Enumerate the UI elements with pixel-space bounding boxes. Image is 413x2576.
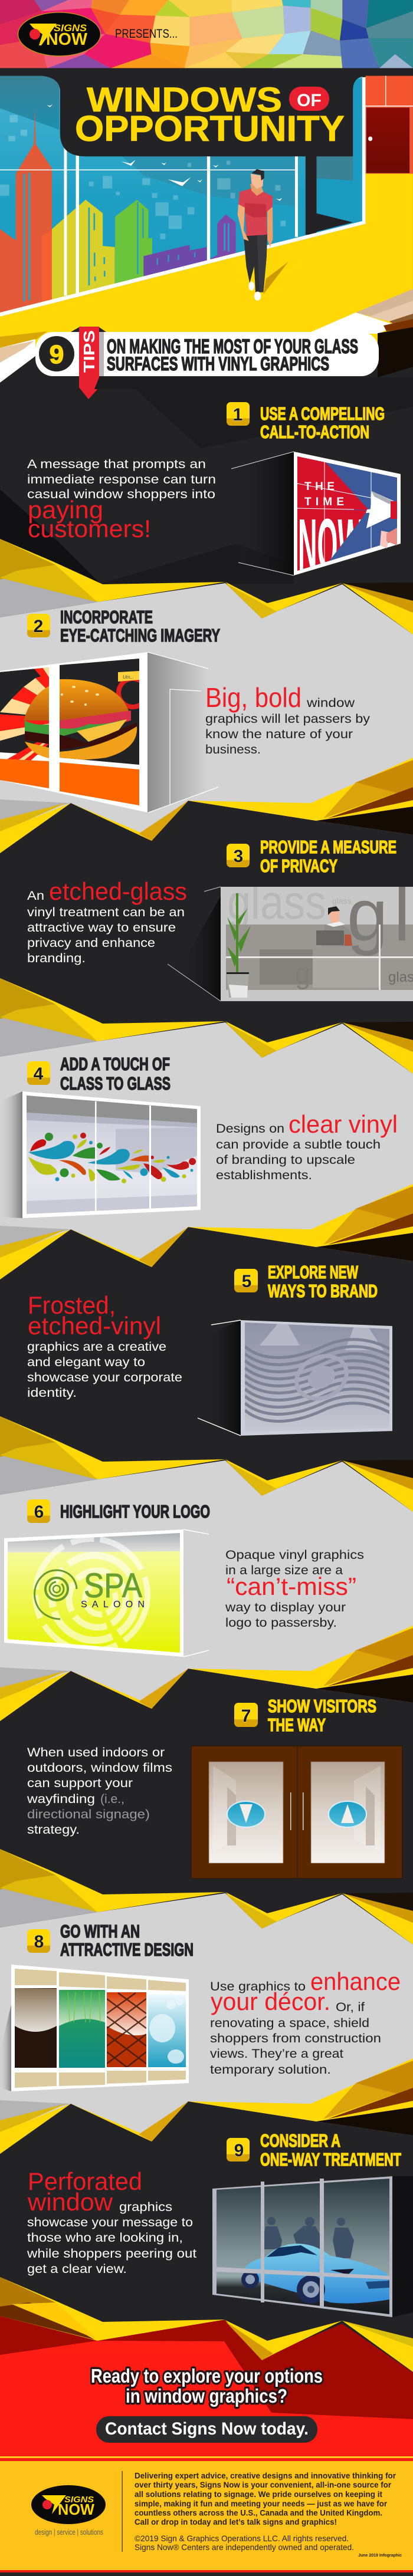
badge 4: 4 (34, 1064, 44, 1084)
body 8: renovating a space, shield (210, 2016, 369, 2030)
silhouettes (261, 2217, 354, 2258)
body 3: attractive way to ensure (27, 921, 176, 935)
panel: tip 4 clear vinyl (0, 1054, 398, 1218)
panel: call to action (91, 2365, 323, 2443)
badge 7: 7 (241, 1706, 251, 1726)
body 8 (210, 1968, 401, 2077)
heading 7: SHOW VISITORS (268, 1696, 376, 1716)
zigzag divider 2 (0, 758, 413, 853)
heading 2: INCORPORATE (60, 607, 153, 627)
heading 5: EXPLORE NEW (268, 1262, 358, 1282)
body 7: can support your (27, 1776, 133, 1790)
panel: tip 8 decor (0, 1921, 401, 2091)
spa spiral (34, 1570, 77, 1619)
body 4: Designs on (216, 1122, 284, 1136)
body 1: customers! (28, 515, 151, 542)
footer logo (31, 2485, 106, 2524)
cta heading (91, 2365, 323, 2407)
footer copyright (135, 2534, 402, 2558)
plant (227, 893, 251, 973)
heading: windows of opportunity (75, 81, 345, 149)
heading 7: THE WAY (268, 1715, 326, 1735)
body 4: clear vinyl (289, 1110, 398, 1138)
body 6: in a large size are a (225, 1564, 343, 1577)
body 5: Frosted, (28, 1291, 116, 1319)
window graphic 6: SPA (84, 1567, 142, 1605)
badge 3: 3 (234, 847, 243, 866)
body 3: branding. (27, 952, 86, 965)
badge 5: 5 (242, 1272, 251, 1291)
panel art 4 (148, 1994, 186, 2067)
heading 7 (268, 1696, 376, 1735)
tips count circle (39, 336, 74, 371)
body 6 (225, 1548, 364, 1630)
contact button (96, 2416, 317, 2443)
heading 8: ATTRACTIVE DESIGN (60, 1939, 194, 1960)
window graphic 3 (168, 874, 413, 1001)
body 6: “can’t-miss” (227, 1572, 356, 1600)
window graphic 9 (212, 2176, 413, 2317)
marquee sign (0, 68, 413, 156)
footer about text: simple, making it fun and meeting your needs — just as we have for (135, 2499, 388, 2508)
footer copyright: June 2019 Infographic (358, 2554, 402, 2558)
heading 1: CALL-TO-ACTION (260, 422, 369, 442)
body 9: while shoppers peering out (27, 2247, 196, 2261)
door graphic (191, 1746, 402, 1878)
body 8: views. They’re a great (210, 2047, 343, 2061)
panel: tip 3 privacy (27, 837, 413, 1001)
body 3 (27, 877, 187, 965)
badge 6 (27, 1499, 50, 1523)
panel: hero storefront illustration (0, 68, 413, 389)
body 9: get a clear view. (27, 2262, 127, 2276)
body 3: etched-glass (49, 877, 187, 905)
sky squares (0, 115, 286, 239)
heading 9 (260, 2130, 401, 2170)
window graphic 1: TIME (304, 496, 344, 508)
panel: section 1 backdrop shading (0, 377, 413, 584)
badge 7 (234, 1703, 258, 1727)
footer about text: Delivering expert advice, creative designs and innovative thinking for (135, 2470, 396, 2480)
heading 8: GO WITH AN (60, 1921, 140, 1942)
zigzag divider 4 (0, 1184, 413, 1279)
logo: Signs Now (18, 12, 100, 56)
sign: up arrow (329, 1801, 366, 1827)
frame mullions (217, 2179, 389, 2307)
panel: gray section 2 (0, 583, 413, 853)
panel: polygon mosaic banner (0, 0, 413, 68)
body 1: immediate response can turn (27, 473, 216, 486)
badge 2 (27, 614, 50, 637)
window graphic 2 (0, 652, 218, 812)
badge 3 (227, 844, 250, 867)
birds (47, 104, 283, 201)
heading 4: ADD A TOUCH OF (60, 1054, 170, 1074)
body 8: shoppers from construction (210, 2032, 381, 2045)
body 2: know the nature of your (205, 728, 353, 741)
body 4: of branding to upscale (216, 1153, 355, 1167)
body 6: way to display your (225, 1601, 346, 1614)
badge 9: 9 (234, 2141, 244, 2160)
panel art 1 (15, 1988, 57, 2068)
badge 8: 8 (34, 1932, 44, 1952)
panel: tip 2 imagery (0, 607, 371, 812)
body 5: graphics are a creative (27, 1340, 166, 1354)
lower hero chevrons (0, 331, 47, 348)
body 8: enhance (310, 1968, 401, 1995)
badge 2: 2 (34, 617, 43, 636)
body 1: casual window shoppers into (27, 488, 215, 501)
body 5: etched-vinyl (28, 1312, 161, 1340)
badge 9 (227, 2138, 250, 2162)
orange wall and door (366, 76, 413, 174)
footer logo: SIGNS (64, 2495, 94, 2505)
pillar and right window (306, 153, 317, 235)
panel: red call to action background (0, 2316, 413, 2459)
panel art 3 (107, 1992, 146, 2067)
panel art 2 (59, 1990, 105, 2068)
body 2: graphics will let passers by (205, 712, 371, 726)
yellow floor (0, 174, 413, 354)
skyline buildings (0, 108, 52, 316)
body 5: identity. (27, 1386, 77, 1400)
window graphic 5 (198, 1320, 392, 1436)
body 4 (216, 1110, 398, 1182)
zigzag divider 5 (0, 1416, 413, 1512)
heading 3: OF PRIVACY (260, 856, 337, 876)
heading: windows of opportunity: OPPORTUNITY (75, 108, 345, 149)
panel: tips banner: TIPS (80, 330, 98, 373)
swirl graphic (28, 1133, 196, 1183)
body 3: An (27, 889, 44, 903)
zigzag divider red (0, 2277, 413, 2372)
heading: windows of opportunity: OF (297, 91, 322, 110)
logo: Signs Now: NOW (46, 30, 88, 49)
body 8: Or, if (336, 2001, 365, 2014)
heading: windows of opportunity: WINDOWS (87, 81, 282, 119)
body 3: privacy and enhance (27, 936, 155, 950)
body 2: business. (205, 743, 261, 756)
body 5 (27, 1291, 182, 1400)
megaphone (366, 491, 397, 548)
panel: gray section 8 (0, 1893, 413, 2154)
body 3: vinyl treatment can be an (27, 906, 185, 919)
heading 4: CLASS TO GLASS (60, 1073, 171, 1094)
window graphic 2: Um... (123, 675, 134, 680)
window graphic 3: g (295, 959, 311, 990)
body 8: Use graphics to (210, 1980, 306, 1993)
panel: tip 9 one-way (27, 2130, 413, 2317)
car (245, 2243, 389, 2304)
window graphic 6: SALOON (81, 1600, 145, 1610)
body 4: establishments. (216, 1169, 312, 1182)
cta heading: Ready to explore your options (91, 2365, 323, 2387)
panel: tips banner (35, 327, 379, 399)
window frame lines (0, 147, 298, 295)
body 9: window (27, 2188, 113, 2216)
body 5: and elegant way to (27, 1356, 145, 1369)
heading 6: HIGHLIGHT YOUR LOGO (60, 1501, 210, 1522)
window graphic 1 (231, 452, 401, 587)
footer about text: over thirty years, Signs Now is your convenient, all-in-one source for (135, 2480, 392, 2489)
body 9: Perforated (28, 2167, 142, 2195)
body 1: A message that prompts an (27, 458, 206, 471)
window graphic 6 (4, 1529, 209, 1657)
heading 1 (260, 403, 385, 442)
body 7: (i.e., (100, 1792, 124, 1806)
footer about text: all solutions relating to signage. We pride ourselves on keeping it (135, 2489, 382, 2499)
window graphic 8 (0, 1965, 189, 2091)
body 1: paying (28, 496, 103, 524)
footer copyright: Signs Now® Centers are independently owned and operated. (135, 2542, 354, 2552)
heading 4 (60, 1054, 171, 1094)
body 6: Opaque vinyl graphics (225, 1548, 364, 1562)
heading 2 (60, 607, 220, 646)
zigzag divider 1 (0, 539, 413, 634)
body 7: When used indoors or (27, 1746, 165, 1759)
footer logo: NOW (58, 2501, 94, 2518)
panel: tip 1 call to action (27, 402, 401, 587)
zigzag divider 3 (0, 978, 413, 1074)
body 2 (205, 682, 371, 756)
footer tagline: design | service | solutions (35, 2528, 103, 2536)
body 7: directional signage) (27, 1808, 150, 1821)
body 2: window (306, 696, 355, 710)
panel: footer (0, 2456, 413, 2576)
window graphic 1: THE (304, 481, 335, 493)
contact button: Contact Signs Now today. (105, 2419, 309, 2439)
logo: Signs Now: SIGNS (54, 22, 87, 34)
heading 9: CONSIDER A (260, 2130, 340, 2151)
body 9: showcase your message to (27, 2216, 193, 2229)
body 2: Big, bold (205, 682, 301, 713)
body 6: logo to passersby. (225, 1616, 337, 1630)
body 9: graphics (119, 2200, 172, 2214)
zigzag divider 7 (0, 1849, 413, 1945)
body 7: wayfinding (27, 1792, 95, 1806)
text: presents: PRESENTS... (115, 27, 178, 41)
cta heading: in window graphics? (126, 2385, 287, 2407)
window graphic 3: glass (227, 876, 326, 929)
body 9: those who are looking in, (27, 2231, 183, 2245)
heading 2: EYE-CATCHING IMAGERY (60, 625, 220, 646)
zigzag divider 8 (0, 2058, 413, 2154)
red ribbon (79, 327, 99, 399)
body 8: your décor. (211, 1988, 330, 2015)
panel: tip 7 wayfinding (27, 1696, 402, 1878)
body 9 (27, 2167, 196, 2276)
panel: gray section 4 (0, 1022, 413, 1279)
zigzag divider 6 (0, 1626, 413, 1721)
body 4: can provide a subtle touch (216, 1138, 381, 1152)
heading 3 (260, 837, 396, 876)
footer about text: Call or drop in today and let’s talk signs and graphics! (135, 2517, 337, 2526)
sign: down arrow (227, 1801, 265, 1827)
body 7: strategy. (27, 1823, 80, 1837)
panel: tip 5 branding (27, 1262, 392, 1436)
window graphic 4 (0, 1091, 201, 1218)
badge 6: 6 (34, 1502, 44, 1522)
badge 4 (27, 1061, 50, 1085)
dark top band (0, 68, 413, 334)
heading 8 (60, 1921, 194, 1960)
sky (0, 76, 362, 317)
panel: tip 6 logo (4, 1499, 364, 1657)
footer about text: countless others across the U.S., Canada and the United Kingdom. (135, 2508, 382, 2518)
panel: tips banner: 9 (50, 340, 64, 369)
badge 1 (227, 402, 250, 426)
badge 1: 1 (233, 405, 242, 425)
person (322, 925, 351, 946)
body 7: outdoors, window films (27, 1761, 172, 1775)
badge 8 (27, 1929, 50, 1953)
body 7 (27, 1746, 172, 1837)
walking man (263, 262, 289, 294)
footer about text (135, 2470, 396, 2526)
body 1 (27, 458, 216, 542)
panel: gray section 6 (0, 1460, 413, 1721)
badge 5 (234, 1269, 258, 1292)
window graphic 3: glass (332, 896, 352, 906)
body 5: showcase your corporate (27, 1371, 182, 1384)
body 8: temporary solution. (210, 2063, 331, 2077)
heading 5 (268, 1262, 378, 1301)
footer copyright: ©2019 Sign & Graphics Operations LLC. All rights reserved. (135, 2534, 349, 2543)
